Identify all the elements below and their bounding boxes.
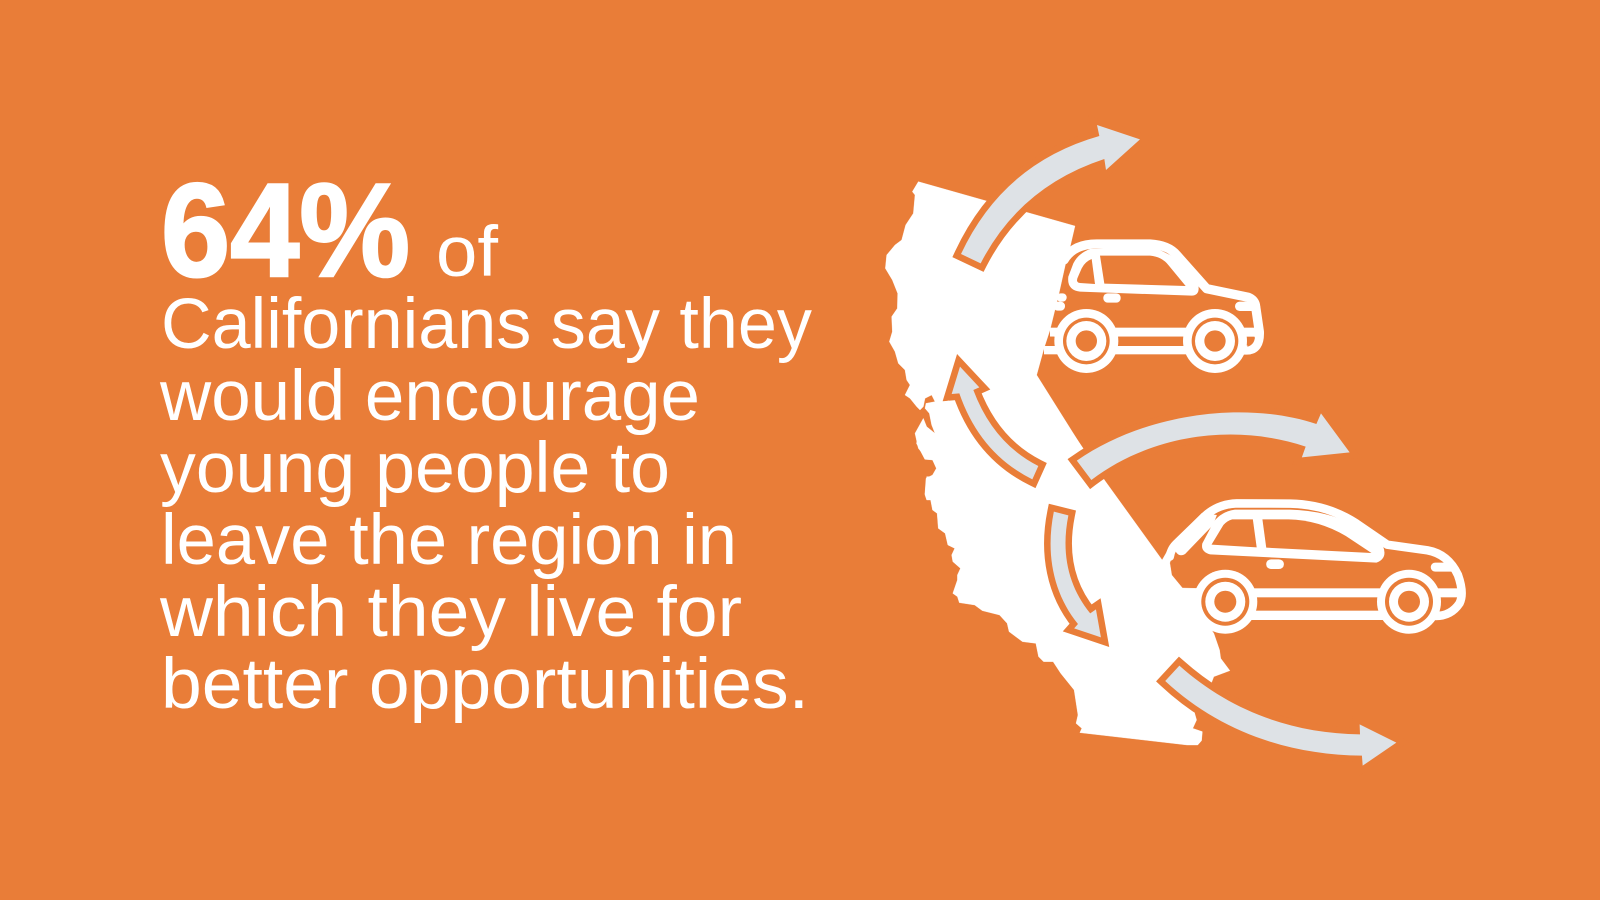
bay sliver (940, 401, 959, 412)
statement text: better opportunities. (161, 645, 809, 724)
wheels of large car (1193, 570, 1441, 634)
statement text: young people to (160, 429, 670, 508)
statement text (159, 285, 812, 724)
statement text: leave the region in (161, 501, 737, 580)
statistic: 64% of: of (436, 213, 498, 292)
statement text: which they live for (159, 573, 742, 652)
statistic: 64% of: 64% (161, 157, 410, 305)
statement text: would encourage (159, 357, 700, 436)
arrow: south outward (1165, 666, 1396, 766)
arrow: north outward (961, 125, 1140, 263)
map of California (885, 182, 1230, 745)
headline text block (159, 157, 812, 724)
arrow: central valley southward (1051, 512, 1101, 637)
icon: large car (1170, 503, 1463, 634)
statement text: Californians say they (161, 285, 812, 364)
arrow: central outward (1077, 412, 1350, 480)
icon: small car (1044, 244, 1259, 373)
arrow: bay area inward (952, 367, 1038, 479)
